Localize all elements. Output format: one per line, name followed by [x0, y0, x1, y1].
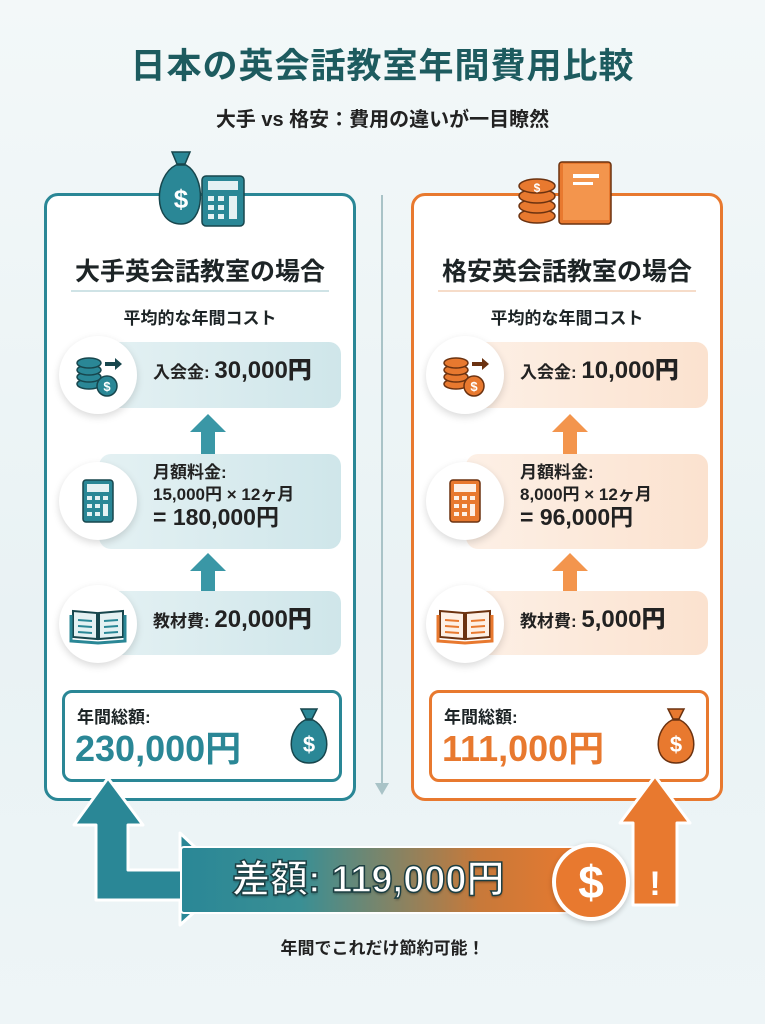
row: entry fee — [56, 342, 341, 420]
icon: money bag: $ — [670, 732, 682, 757]
title: 日本の英会話教室年間費用比較 — [130, 47, 634, 86]
panel: major schools — [44, 193, 356, 801]
arrow up — [552, 553, 588, 591]
caption: 平均的な年間コスト — [124, 309, 276, 328]
center divider arrow — [375, 195, 389, 795]
total box — [62, 690, 342, 782]
arrow up — [190, 414, 226, 454]
row: monthly fee: = 180,000円 — [153, 504, 279, 530]
total box: 230,000円 — [75, 728, 241, 769]
footer text: 年間でこれだけ節約可能！ — [280, 939, 484, 958]
total box: 年間総額: — [444, 708, 518, 727]
icon: money bag and calculator (left) — [158, 151, 245, 227]
caption: 平均的な年間コスト — [490, 309, 644, 328]
icon: coins: $ — [470, 379, 478, 394]
row: entry fee — [424, 342, 708, 420]
row: materials: 教材費: 5,000円 — [520, 606, 665, 633]
icon: coins and book (right): $ — [534, 181, 541, 195]
icon: money bag and calculator (left): $ — [174, 184, 189, 214]
arrow up — [190, 553, 226, 591]
total box: 111,000円 — [442, 728, 604, 769]
total box: 年間総額: — [77, 708, 151, 727]
row: materials — [56, 591, 341, 668]
icon: coins: $ — [103, 379, 111, 394]
row: monthly fee: = 96,000円 — [520, 504, 633, 530]
icon: book — [426, 585, 504, 663]
row: monthly fee: 月額料金: — [520, 463, 594, 482]
row: entry fee: 入会金: 10,000円 — [520, 357, 679, 384]
arrow: orange up arrow to budget total: ! — [649, 865, 661, 903]
icon: dollar coin: $ — [578, 856, 604, 908]
icon: dollar coin — [552, 843, 630, 921]
row: materials: 教材費: 20,000円 — [153, 606, 312, 633]
icon: money bag — [658, 708, 694, 764]
icon: calculator — [426, 462, 504, 540]
heading: 大手英会話教室の場合 — [75, 258, 325, 286]
row: materials — [424, 591, 708, 668]
row: monthly fee — [56, 454, 341, 549]
arrow up — [552, 414, 588, 454]
total box — [429, 690, 709, 782]
callout: difference bar: 差額: 119,000円 — [232, 859, 504, 901]
icon: book — [59, 585, 137, 663]
row: monthly fee: 8,000円 × 12ヶ月 — [520, 485, 652, 504]
icon: coins — [426, 336, 504, 414]
row: monthly fee: 月額料金: — [153, 463, 227, 482]
heading: 格安英会話教室の場合 — [442, 258, 692, 286]
arrow: orange up arrow to budget total — [618, 778, 692, 906]
icon: coins — [59, 336, 137, 414]
subtitle: 大手 vs 格安：費用の違いが一目瞭然 — [216, 109, 549, 131]
callout: difference bar — [180, 846, 580, 914]
row: entry fee: 入会金: 30,000円 — [153, 357, 312, 384]
icon: coins and book (right) — [518, 161, 612, 225]
panel: budget schools — [411, 193, 723, 801]
row: monthly fee: 15,000円 × 12ヶ月 — [153, 485, 294, 504]
icon: money bag: $ — [303, 732, 315, 757]
row: monthly fee — [424, 454, 708, 549]
icon: calculator — [59, 462, 137, 540]
arrow: teal L-arrow from large school total — [72, 779, 196, 926]
icon: money bag — [290, 708, 328, 764]
